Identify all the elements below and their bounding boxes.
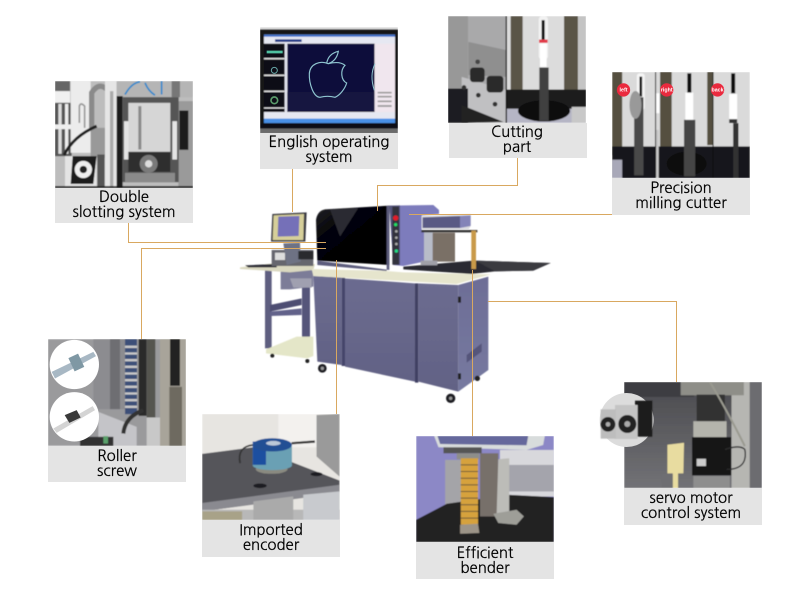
caption — [612, 178, 750, 215]
caption: part — [503, 140, 532, 155]
inset: ball screw — [50, 340, 99, 389]
caption: Cutting — [491, 125, 543, 140]
caption: Efficient — [457, 546, 514, 561]
caption: slotting system — [73, 205, 175, 220]
caption: Imported — [239, 523, 303, 538]
panel: roller screw — [48, 339, 186, 482]
inset: servo motors — [600, 393, 654, 447]
panel: efficient bender — [416, 436, 554, 579]
panel: english operating system — [260, 27, 398, 169]
photo: three cutter positions — [612, 72, 750, 178]
caption: Precision — [650, 181, 712, 196]
monitor — [271, 212, 307, 242]
caption — [260, 133, 398, 169]
photo: encoder on plate — [202, 414, 340, 520]
badges: left right back — [617, 83, 724, 97]
cabinet — [313, 276, 488, 403]
caption: system — [306, 150, 352, 165]
badges: left right back: right — [661, 88, 673, 94]
panel: servo motor control system — [600, 382, 762, 525]
workstation cart — [240, 243, 315, 363]
glass cover — [316, 206, 389, 271]
caption: Roller — [97, 449, 137, 464]
caption: milling cutter — [635, 196, 727, 211]
badges: left right back: back — [712, 88, 724, 94]
panel: precision milling cutter — [612, 72, 750, 215]
caption — [202, 520, 340, 557]
caption: Double — [99, 190, 149, 205]
photo: servo motor — [624, 382, 762, 488]
caption — [624, 488, 762, 525]
caption: servo motor — [649, 491, 733, 506]
caption: English operating — [269, 135, 389, 150]
caption — [416, 542, 554, 579]
control panel and head — [389, 205, 477, 269]
caption: encoder — [243, 538, 300, 553]
machine photo: bending machine — [240, 205, 551, 403]
panel: double slotting system — [55, 81, 193, 223]
photo: bender column — [416, 436, 554, 542]
photo: screw and guide insets — [48, 339, 186, 446]
panel: cutting part — [448, 16, 587, 158]
photo: monitor with apple outline — [260, 27, 398, 133]
connector lines — [128, 158, 676, 436]
caption: control system — [641, 506, 741, 521]
badges: left right back: left — [620, 88, 628, 94]
caption — [55, 188, 193, 223]
photo: slotting unit — [55, 81, 193, 188]
caption: screw — [97, 464, 137, 479]
photo: cutting head — [448, 16, 586, 123]
inset: linear guide — [50, 392, 99, 442]
panel: imported encoder — [202, 414, 340, 557]
work table top — [312, 261, 551, 284]
caption — [449, 123, 587, 158]
caption: bender — [460, 561, 510, 576]
caption — [48, 446, 186, 482]
